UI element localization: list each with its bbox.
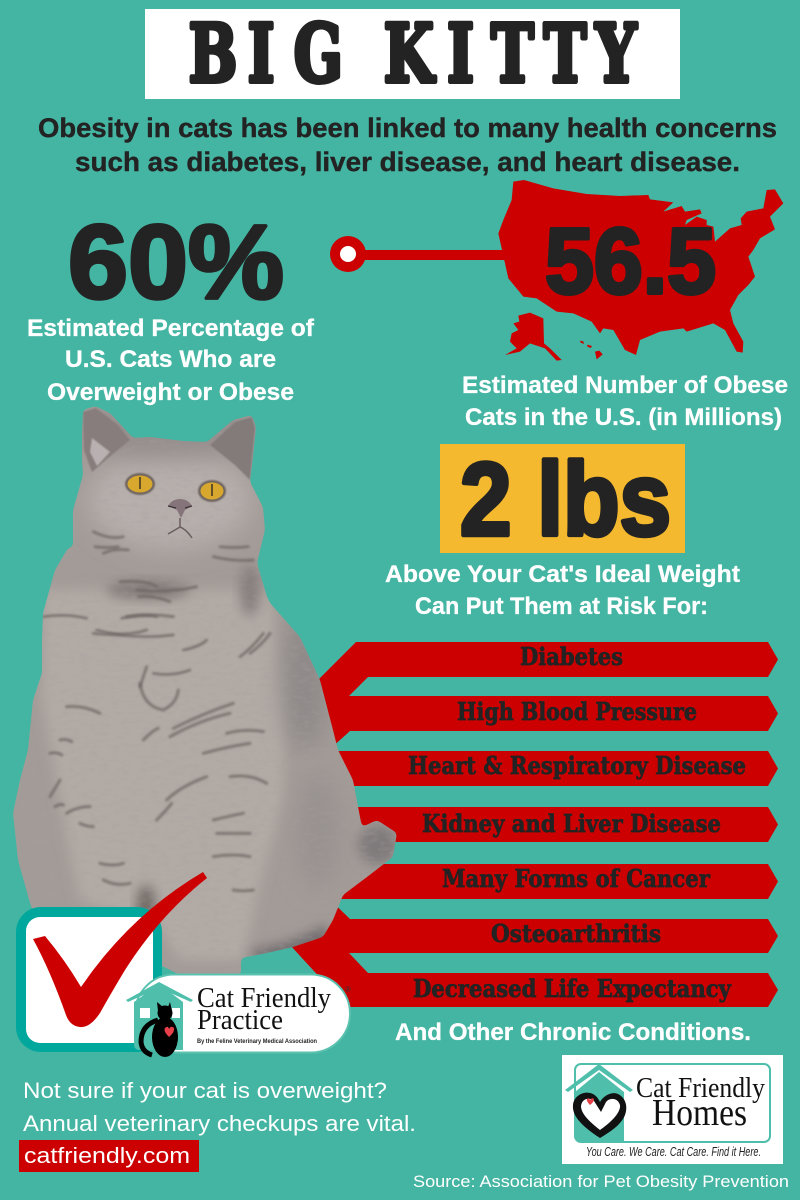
risk labels: High Blood Pressure bbox=[457, 697, 697, 726]
stat: 60 percent bbox=[27, 204, 315, 406]
risk heading: Above Your Cat's Ideal Weight bbox=[385, 561, 740, 588]
red check mark bbox=[33, 872, 207, 1027]
stat: 2 lbs: 2 lbs bbox=[460, 442, 671, 558]
stat: 60 percent: 60% bbox=[68, 204, 284, 321]
logo: Cat Friendly Homes: Homes bbox=[652, 1092, 747, 1134]
risk labels bbox=[408, 642, 746, 1003]
risk heading bbox=[385, 561, 740, 620]
risk labels: Osteoarthritis bbox=[491, 919, 661, 948]
arrows: osteoarthritis and life expectancy bbox=[290, 890, 778, 1007]
cat photo illustration bbox=[13, 406, 396, 974]
nose and mouth bbox=[168, 499, 192, 538]
logo: Cat Friendly Practice: By the Feline Veterinary Medical Association bbox=[197, 1038, 317, 1045]
risk heading: Can Put Them at Risk For: bbox=[415, 593, 708, 620]
arrows: diabetes and blood pressure bbox=[300, 642, 778, 758]
vet checkup note: Annual veterinary checkups are vital. bbox=[23, 1111, 416, 1136]
stat: 56.5 million: 56.5 bbox=[545, 209, 716, 313]
vet checkup note: Not sure if your cat is overweight? bbox=[23, 1078, 387, 1103]
risk labels: Many Forms of Cancer bbox=[442, 864, 710, 893]
ears bbox=[83, 408, 255, 480]
arrow: kidney and liver bbox=[340, 807, 778, 842]
stat: 60 percent: Overweight or Obese bbox=[47, 379, 294, 406]
source credit: Source: Association for Pet Obesity Prevention bbox=[413, 1173, 789, 1191]
icon: black cat with heart bbox=[141, 1002, 178, 1057]
connector pin bbox=[330, 236, 510, 272]
risk labels: Diabetes bbox=[520, 642, 623, 671]
stat: 60 percent: U.S. Cats Who are bbox=[65, 346, 276, 373]
stat: 56.5 million bbox=[462, 209, 788, 431]
chest and body shading bbox=[42, 412, 396, 960]
logo: Cat Friendly Homes: Cat Friendly bbox=[636, 1072, 765, 1104]
intro text: Obesity in cats has been linked to many health concerns bbox=[38, 113, 777, 143]
intro text: such as diabetes, liver disease, and heart disease. bbox=[75, 147, 740, 177]
arrow: cancer bbox=[320, 864, 778, 899]
website link: catfriendly.com bbox=[24, 1143, 190, 1168]
eyes bbox=[125, 473, 226, 502]
logo: Cat Friendly Practice: Cat Friendly bbox=[197, 983, 331, 1014]
logo: Cat Friendly Practice bbox=[126, 974, 351, 1057]
stat: 60 percent: Estimated Percentage of bbox=[27, 315, 315, 342]
other conditions text: And Other Chronic Conditions. bbox=[395, 1019, 751, 1046]
map: United States bbox=[498, 180, 783, 361]
risk labels: Heart & Respiratory Disease bbox=[408, 751, 746, 780]
intro text bbox=[38, 113, 777, 177]
fur ripples on head and neck bbox=[43, 532, 263, 687]
stat: 56.5 million: Cats in the U.S. (in Millions) bbox=[465, 404, 782, 431]
risk labels: Kidney and Liver Disease bbox=[422, 809, 721, 838]
arrow: heart and respiratory bbox=[320, 751, 778, 786]
risk labels: Decreased Life Expectancy bbox=[413, 974, 732, 1003]
logo: Cat Friendly Homes bbox=[562, 1055, 783, 1164]
fur ripples on chest bbox=[50, 615, 270, 891]
logo: Cat Friendly Practice: ® bbox=[345, 985, 351, 994]
logo: Cat Friendly Practice: Practice bbox=[197, 1005, 283, 1036]
icon: cats forming a heart bbox=[573, 1093, 626, 1138]
stat: 56.5 million: Estimated Number of Obese bbox=[462, 372, 788, 399]
vet checkup note bbox=[23, 1078, 416, 1136]
website link bbox=[19, 1140, 199, 1172]
title: BIG KITTY bbox=[189, 8, 638, 101]
risk list arrows bbox=[290, 642, 778, 1007]
checkbox bbox=[16, 907, 162, 1052]
